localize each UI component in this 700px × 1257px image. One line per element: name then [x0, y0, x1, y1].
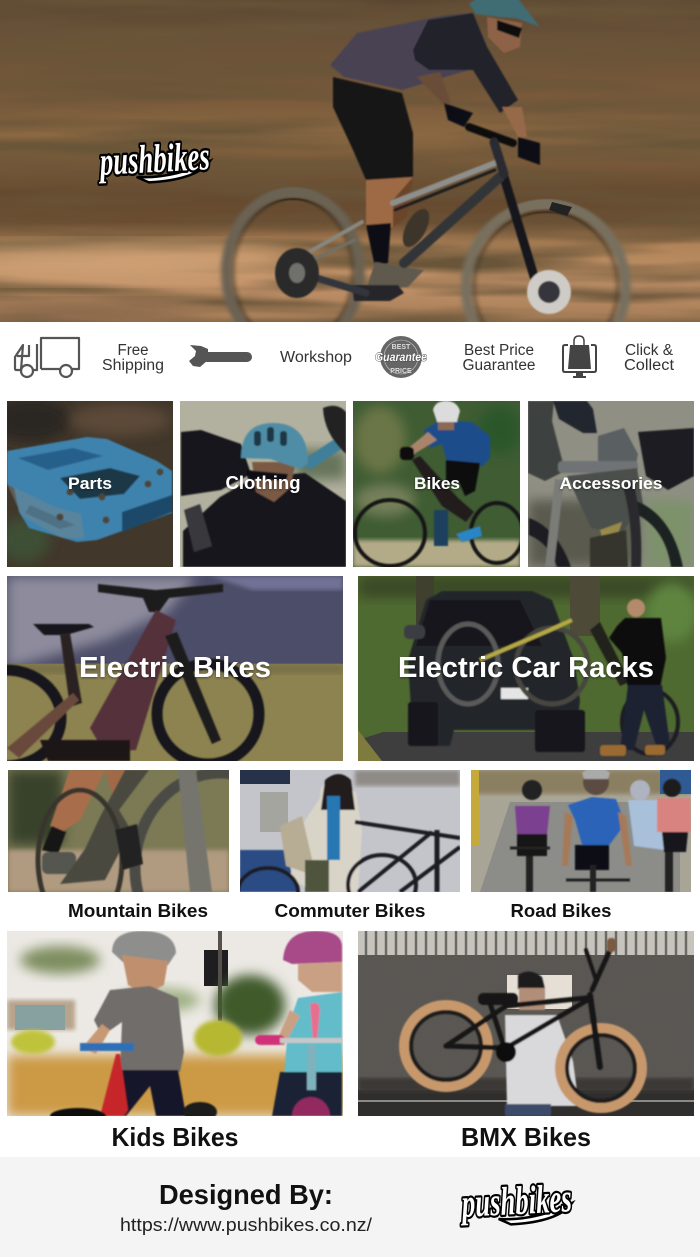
panel: electric bikes — [0, 576, 343, 766]
bikes on rack — [438, 624, 498, 704]
feature label: click and collect: Collect — [624, 357, 675, 374]
riders — [663, 779, 681, 797]
panel: kids bikes — [7, 931, 343, 1124]
man — [627, 599, 645, 617]
icon: best price guarantee badge — [375, 336, 427, 378]
feature label: click and collect: Click & — [625, 342, 674, 359]
hero logo: pushbikes — [97, 133, 211, 184]
car — [408, 591, 580, 746]
caption: kids bikes: Kids Bikes — [112, 1122, 238, 1152]
boy — [112, 931, 176, 965]
footer panel — [0, 1157, 700, 1257]
panel: electric car racks — [358, 576, 698, 761]
panel: accessories — [528, 401, 694, 567]
pedal — [7, 437, 172, 542]
person jacket — [183, 473, 346, 567]
hero photo: cyclist on motion-blurred trail — [0, 0, 700, 370]
caption: commuter bikes: Commuter Bikes — [274, 901, 426, 921]
girl — [283, 931, 342, 964]
label: electric car racks: Electric Car Racks — [398, 652, 654, 684]
footer logo: pushbikes — [459, 1175, 573, 1226]
icon: shopping bag on monitor — [563, 336, 596, 378]
rear wheel — [226, 192, 360, 352]
label: electric bikes: Electric Bikes — [79, 652, 271, 684]
icon: delivery truck — [15, 338, 79, 377]
leg and shoe — [366, 177, 413, 227]
caption: mountain bikes: Mountain Bikes — [68, 901, 208, 921]
panel: parts — [0, 398, 173, 567]
icon: best price guarantee badge: BEST — [392, 344, 411, 351]
caption: bmx bikes: BMX Bikes — [461, 1122, 591, 1152]
footer heading: Designed By: — [159, 1179, 333, 1210]
face — [252, 462, 296, 502]
head and helmet — [487, 17, 522, 53]
label: clothing: Clothing — [226, 473, 300, 493]
torso and jersey — [330, 13, 487, 90]
caption: road bikes: Road Bikes — [510, 901, 612, 921]
brake disc — [527, 270, 571, 314]
label: bikes: Bikes — [414, 474, 460, 493]
icon: best price guarantee badge: Guarantee — [375, 350, 427, 364]
icon: wrench — [189, 345, 252, 367]
panel: commuter bikes — [238, 770, 460, 916]
panel: mountain bikes — [8, 770, 305, 963]
panel: clothing — [180, 401, 346, 567]
feature label: workshop: Workshop — [280, 349, 352, 366]
feature label: best price guarantee: Guarantee — [462, 357, 536, 374]
panel: bikes — [353, 401, 523, 567]
footer logo — [459, 1175, 573, 1227]
feature label: free shipping: Free — [118, 342, 148, 359]
panel: road bikes — [471, 767, 691, 892]
shorts — [333, 77, 413, 180]
icon: best price guarantee badge: PRICE — [390, 368, 412, 375]
footer url: https://www.pushbikes.co.nz/ — [120, 1215, 372, 1235]
front wheel — [466, 204, 626, 370]
label: parts: Parts — [68, 474, 112, 493]
label: accessories: Accessories — [560, 474, 662, 493]
drivetrain — [275, 248, 319, 298]
feature strip — [15, 336, 675, 378]
frame — [290, 127, 536, 293]
feature label: free shipping: Shipping — [102, 357, 164, 374]
hero logo — [97, 133, 211, 185]
panel: bmx bikes — [358, 931, 694, 1116]
helmet — [241, 423, 308, 469]
feature label: best price guarantee: Best Price — [464, 342, 534, 359]
arms — [417, 72, 451, 105]
